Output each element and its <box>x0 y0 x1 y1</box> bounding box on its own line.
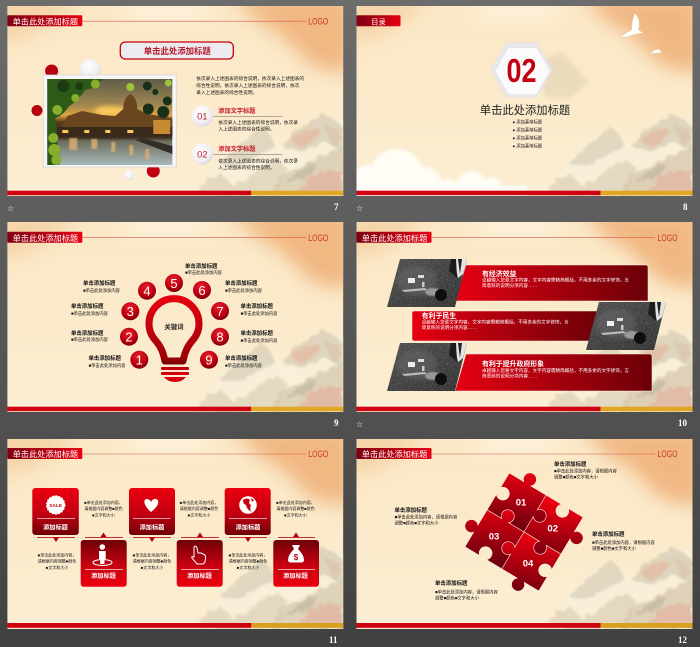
slide 9 title tab: 单击此处添加标题 <box>13 233 78 243</box>
page number 8: 8 <box>683 202 688 212</box>
subtitle button: 单击此处添加标题 <box>144 46 211 56</box>
puzzle labels: 单击添加标题 <box>592 530 625 538</box>
icon: star 7: ☆ <box>7 204 14 213</box>
card: money bag: $ <box>294 553 299 562</box>
card: hand pointer <box>177 540 223 587</box>
puzzle labels: ■单击此处添加内容，请根据内容 <box>554 468 617 474</box>
text blocks between cards: ■单击此处添加内容， <box>84 499 123 505</box>
section bullet list: ● 添加基地标题 <box>512 126 543 134</box>
intro paragraph <box>196 75 304 96</box>
puzzle labels: ■单击此处添加内容，请根据内容 <box>592 539 655 546</box>
text blocks between cards: ■文字和大小 <box>284 512 307 518</box>
slide 9 background <box>0 212 352 412</box>
ribbon 2: 卓越输入您要文字内容，文字内容需精简概括，不用多余的文字修饰，言 <box>422 319 569 326</box>
card: money bag <box>273 540 319 587</box>
photo 1 <box>387 259 467 307</box>
photo 3 <box>387 343 467 391</box>
puzzle labels: 单击添加标题 <box>394 506 427 514</box>
puzzle labels: ■单击此处添加内容，请根据内容 <box>394 514 458 520</box>
item 02: 依次录入上述图表的综合说明，依次录 <box>218 158 298 164</box>
labels around the bulb: 单击添加标题 <box>225 279 258 287</box>
slide 7 background <box>0 0 352 196</box>
text blocks between cards: ■单击此处添加内容， <box>180 499 218 505</box>
item 02: 02 <box>197 148 208 159</box>
labels around the bulb: ■单击此处添加内容 <box>240 337 278 344</box>
light bulb <box>149 299 199 382</box>
bottom bar <box>7 407 343 411</box>
decorative circles <box>32 59 160 180</box>
labels around the bulb: 单击添加标题 <box>240 302 273 310</box>
ribbon 2 <box>412 311 602 341</box>
slide 12 background <box>346 429 700 629</box>
icon: star 8: ☆ <box>356 204 363 213</box>
puzzle numbers: 04 <box>523 558 534 570</box>
numbered balls 1 to 9: 3 <box>127 304 134 319</box>
section bullet list <box>512 118 543 150</box>
card: person <box>81 540 127 587</box>
panel: slide 9 <box>0 212 352 412</box>
labels around the bulb: ■单击此处添加内容 <box>225 362 263 369</box>
ribbon 3: 卓越输入您要文字内容，文字内容需精简概括，不用多余的文字修饰，言 <box>482 367 629 374</box>
icon: star 10: ☆ <box>356 420 363 429</box>
item 01: 入上述图表的综合性说明。 <box>218 126 275 132</box>
puzzle numbers: 01 <box>516 498 527 508</box>
labels around the bulb: ■单击此处添加内容 <box>225 287 263 294</box>
intro paragraph: 综合性说明。依次录入上述图表的综合说明，依次 <box>196 82 300 89</box>
section bullet list: ● 添加基地标题 <box>512 134 543 142</box>
text blocks between cards: ■文字和大小 <box>188 512 210 518</box>
bottom bar <box>356 191 692 195</box>
numbered balls 1 to 9: 7 <box>216 304 224 319</box>
ribbon 3: 有利于提升政府形象 <box>482 359 544 368</box>
slide 10 title tab: 单击此处添加标题 <box>362 233 427 243</box>
slide 10 background <box>346 212 700 412</box>
card: globe: 添加标题 <box>236 524 261 532</box>
labels around the bulb: ■单击此处添加内容 <box>88 362 126 369</box>
card: hand pointer: 添加标题 <box>187 572 213 580</box>
labels around the bulb <box>71 262 278 369</box>
puzzle numbers: 03 <box>489 532 499 542</box>
item 01: 01 <box>197 110 208 121</box>
slide 10 logo: LOGO <box>658 232 678 243</box>
item 02: 入上述图表的综合性说明。 <box>218 164 275 171</box>
item 01: 依次录入上述图表的综合说明，依次录 <box>218 119 298 126</box>
puzzle labels: 调整■颜色■文字和大小 <box>394 520 439 526</box>
page number 7: 7 <box>334 202 339 212</box>
labels around the bulb: 单击添加标题 <box>88 354 121 362</box>
panel: slide 10 <box>346 212 700 412</box>
light bulb: 关键词 <box>164 322 184 331</box>
puzzle labels: ■单击此处添加内容，请根据内容 <box>435 588 498 596</box>
text blocks between cards <box>38 499 315 570</box>
page number 9: 9 <box>334 418 339 428</box>
intro paragraph: 依次录入上述图表的综合说明，依次录入上述图表的 <box>196 75 304 82</box>
labels around the bulb: 单击添加标题 <box>225 354 258 362</box>
bottom bar <box>356 407 692 411</box>
card: person: 添加标题 <box>91 572 117 580</box>
text blocks between cards: ■文字和大小 <box>141 564 163 570</box>
text blocks between cards: ■单击此处添加内容， <box>276 499 315 505</box>
puzzle labels: 调整■颜色■文字和大小 <box>592 545 637 552</box>
numbered balls 1 to 9: 1 <box>136 352 143 368</box>
photo: river and dome at sunset <box>43 75 176 167</box>
card: sale <box>32 488 79 535</box>
card: heart: 添加标题 <box>140 524 165 532</box>
connector arrows <box>37 532 315 542</box>
ribbon 2: 有利于民生 <box>422 311 456 320</box>
logo: LOGO <box>308 15 328 26</box>
card: heart <box>129 488 175 535</box>
text blocks between cards: 请根据内容调整■颜色 <box>180 505 218 511</box>
page number 10: 10 <box>678 418 688 428</box>
card: money bag: 添加标题 <box>283 572 309 580</box>
labels around the bulb: 单击添加标题 <box>240 329 273 337</box>
numbered balls 1 to 9: 2 <box>125 330 133 344</box>
numbered balls 1 to 9: 5 <box>170 276 178 291</box>
labels around the bulb: 单击添加标题 <box>71 329 104 337</box>
intro paragraph: 录入上述图表的综合性说明。 <box>196 89 257 96</box>
labels around the bulb: ■单击此处添加内容 <box>185 269 223 276</box>
puzzle labels: 单击添加标题 <box>435 579 468 587</box>
panel: slide 11 <box>0 429 352 629</box>
panel: slide 8 <box>356 6 692 196</box>
card: globe <box>225 488 271 535</box>
slide 8 background <box>346 0 700 196</box>
bottom bar <box>7 623 343 628</box>
slide 12 logo: LOGO <box>658 448 678 459</box>
page number 12: 12 <box>678 635 688 645</box>
ribbon 1: 卓越输入您要文字内容，文字内容需精简概括，不用多余的文字修饰，言 <box>482 277 629 284</box>
text blocks between cards: ■单击此处添加内容， <box>229 552 267 558</box>
slide 9 logo: LOGO <box>308 232 328 243</box>
labels around the bulb: ■单击此处添加内容 <box>71 310 109 317</box>
text blocks between cards: ■单击此处添加内容， <box>133 552 171 558</box>
hexagon number badge <box>490 43 588 98</box>
puzzle labels: 调整■颜色■文字和大小 <box>435 594 480 602</box>
hexagon number badge: 02 <box>506 52 536 89</box>
slide 11 title tab: 单击此处添加标题 <box>13 449 78 459</box>
ribbon 1 <box>455 265 648 301</box>
puzzle labels: 单击添加标题 <box>554 460 587 468</box>
photo 2 <box>586 302 666 350</box>
item 02 <box>192 144 298 171</box>
item 01 <box>192 106 298 132</box>
item 02: 添加文字标题 <box>218 145 256 153</box>
subtitle button <box>120 42 233 59</box>
section bullet list: ● 添加基地标题 <box>512 118 543 126</box>
icon: doves <box>620 13 662 55</box>
numbered balls 1 to 9: 9 <box>205 352 213 368</box>
panel: slide 12 <box>346 429 700 629</box>
text blocks between cards: ■单击此处添加内容， <box>38 552 76 558</box>
ribbon 1: 简意赅的说明分项内容…… <box>482 282 537 289</box>
labels around the bulb: ■单击此处添加内容 <box>83 287 121 294</box>
numbered balls 1 to 9: 4 <box>143 284 151 298</box>
text blocks between cards: 请根据内容调整■颜色 <box>229 558 267 564</box>
panel: slide 7 <box>0 0 352 196</box>
bottom bar <box>7 191 343 195</box>
ribbon 3: 简意赅的说明分项内容…… <box>482 372 537 380</box>
ribbon 2: 简意赅的说明分项内容…… <box>422 324 477 331</box>
numbered balls 1 to 9: 8 <box>216 330 224 344</box>
ribbon 3 <box>455 354 652 391</box>
bottom bar <box>356 623 692 628</box>
contents tab: 目录 <box>371 17 386 26</box>
text blocks between cards: ■文字和大小 <box>46 564 68 570</box>
item 01: 添加文字标题 <box>218 107 256 115</box>
text blocks between cards: 请根据内容调整■颜色 <box>38 558 76 564</box>
puzzle labels <box>394 460 655 602</box>
text blocks between cards: ■文字和大小 <box>237 564 259 570</box>
puzzle of four pieces <box>449 457 599 607</box>
slide 12 title tab: 单击此处添加标题 <box>362 449 427 459</box>
text blocks between cards: 请根据内容调整■颜色 <box>276 505 315 511</box>
card: sale: 添加标题 <box>43 524 69 532</box>
labels around the bulb: 单击添加标题 <box>83 279 116 287</box>
text blocks between cards: ■文字和大小 <box>92 512 115 518</box>
labels around the bulb: 单击添加标题 <box>71 302 104 310</box>
labels around the bulb: ■单击此处添加内容 <box>71 336 109 343</box>
slide 11 background <box>0 429 352 629</box>
contents tab <box>356 15 400 26</box>
page number 11: 11 <box>329 635 338 645</box>
labels around the bulb: 单击添加标题 <box>185 262 218 270</box>
text blocks between cards: 请根据内容调整■颜色 <box>133 558 171 564</box>
text blocks between cards: 请根据内容调整■颜色 <box>84 505 123 511</box>
slide 7 title tab: 单击此处添加标题 <box>13 16 78 26</box>
slide 11 logo: LOGO <box>308 448 328 459</box>
clouds <box>356 148 530 196</box>
puzzle labels: 调整■颜色■文字和大小 <box>554 474 599 480</box>
ribbon 1: 有经济效益 <box>482 269 517 278</box>
card: sale: SALE <box>49 503 63 509</box>
section title: 单击此处添加标题 <box>480 103 570 117</box>
numbered balls 1 to 9: 6 <box>198 283 206 298</box>
labels around the bulb: ■单击此处添加内容 <box>240 310 278 317</box>
section bullet list: ● 添加基地标题 <box>512 142 543 150</box>
puzzle numbers: 02 <box>547 524 558 534</box>
puzzle numbers <box>489 498 558 570</box>
numbered balls 1 to 9 <box>120 274 229 369</box>
